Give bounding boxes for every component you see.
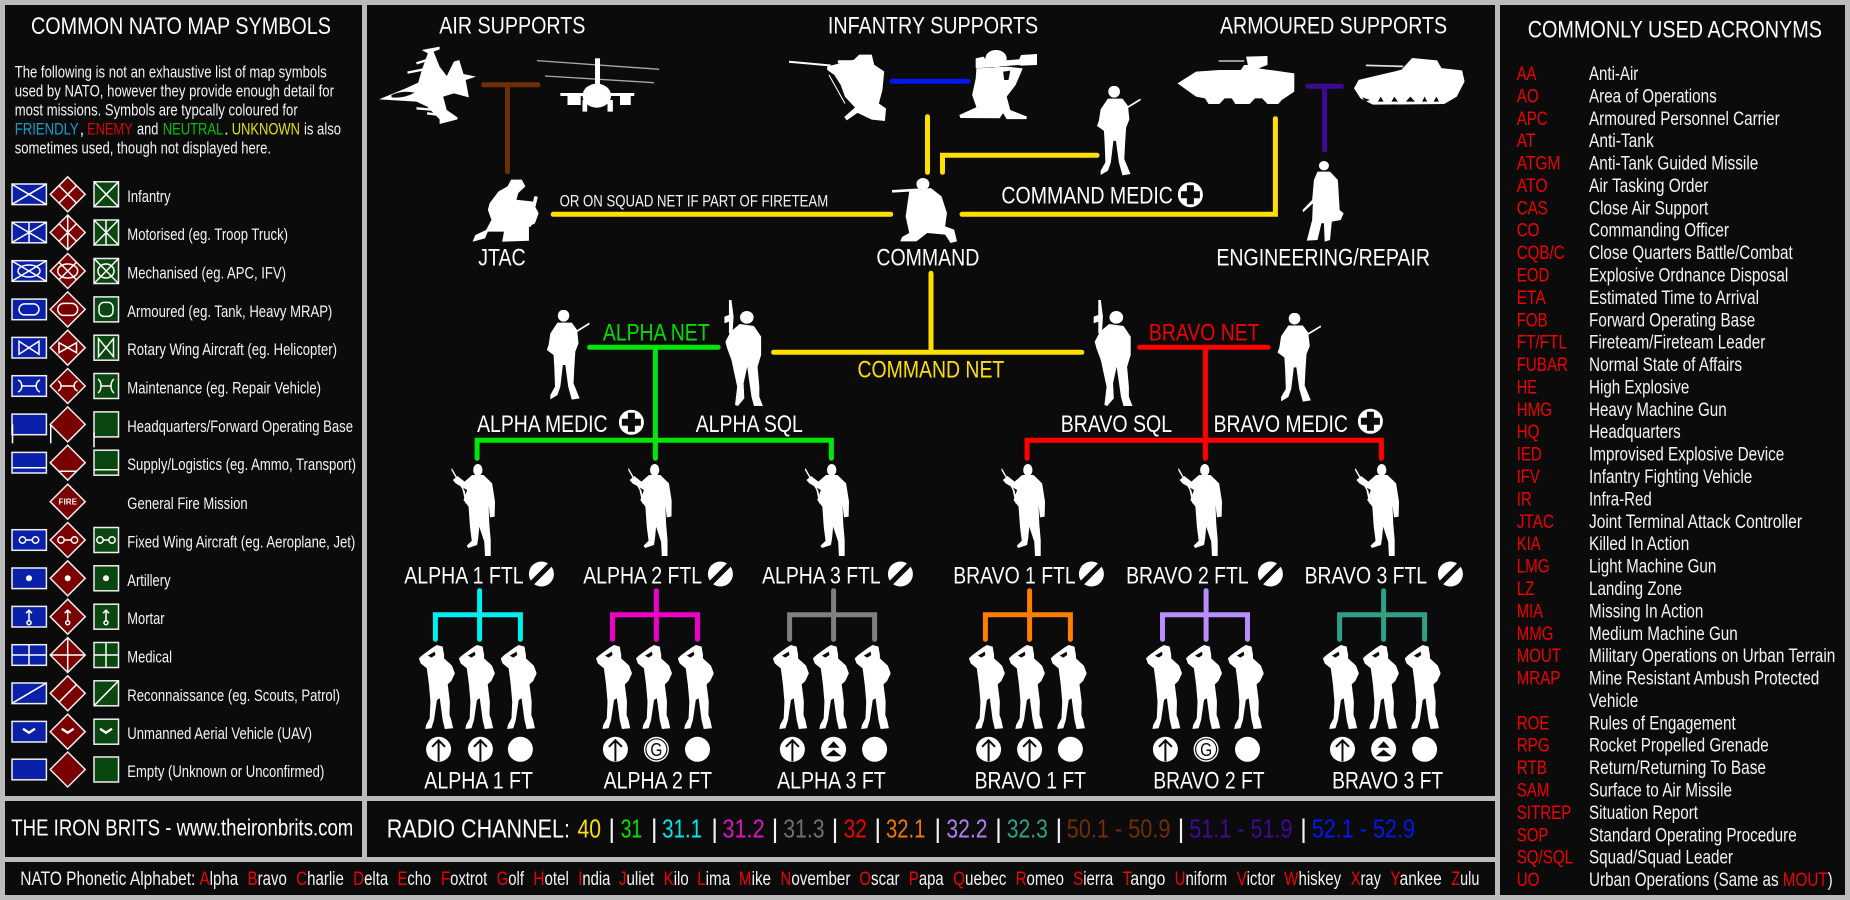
- panel: radio channels: 40: [578, 813, 601, 843]
- acronym list: Fireteam/Fireteam Leader: [1589, 333, 1766, 354]
- heading: air supports: AIR SUPPORTS: [439, 13, 585, 40]
- heading: infantry supports: INFANTRY SUPPORTS: [828, 13, 1038, 40]
- acronym list: IFV: [1517, 467, 1540, 488]
- panel: website credit: [5, 801, 362, 857]
- panel: radio channels: |: [874, 813, 881, 843]
- legend row: medical: [12, 638, 172, 672]
- acronym list: AO: [1517, 86, 1539, 107]
- connector: command net: [774, 273, 1082, 352]
- icon: JTAC kneeling soldier: [472, 180, 538, 242]
- acronym list: Landing Zone: [1589, 579, 1682, 600]
- group: alpha 1 fireteam: ALPHA 1 FT: [424, 768, 533, 795]
- panel: radio channels: RADIO CHANNEL:: [387, 813, 570, 843]
- panel: NATO phonetic alphabet: Romeo: [1016, 869, 1064, 890]
- legend row: maintenance: [12, 368, 321, 404]
- panel: NATO phonetic alphabet: Mike: [739, 869, 771, 890]
- acronym list: IED: [1517, 445, 1542, 466]
- acronym list: [1517, 64, 1835, 891]
- panel: NATO phonetic alphabet: Quebec: [953, 869, 1006, 890]
- acronym list: AA: [1517, 64, 1537, 85]
- panel: website credit: THE IRON BRITS - www.theironbrits.com: [11, 815, 353, 841]
- panel: NATO phonetic alphabet: Delta: [353, 869, 389, 890]
- panel: common NATO map symbols: [5, 5, 362, 796]
- label: alpha net: ALPHA NET: [603, 319, 710, 346]
- label: alpha squad leader: ALPHA SQL: [696, 411, 803, 438]
- connector: command to medic: [942, 155, 1097, 172]
- panel: NATO phonetic alphabet: Foxtrot: [441, 869, 488, 890]
- acronym list: Commanding Officer: [1589, 221, 1730, 242]
- group: alpha 2 fireteam: [583, 464, 733, 795]
- acronym list: Anti-Tank: [1589, 131, 1654, 152]
- acronym list: AT: [1517, 131, 1536, 152]
- panel: radio channels: |: [1300, 813, 1307, 843]
- acronym list: SOP: [1517, 825, 1548, 846]
- text block: introduction: sometimes used, though not displayed here.: [15, 139, 271, 158]
- icon: bravo medic cross: [1358, 409, 1383, 434]
- acronym list: RTB: [1517, 758, 1547, 779]
- panel: radio channels: 31.1: [662, 813, 702, 843]
- legend row: infantry: [12, 177, 171, 212]
- acronym list: Anti-Air: [1589, 64, 1639, 85]
- group: alpha 2 fireteam: ALPHA 2 FTL: [583, 562, 702, 589]
- icon: command medic soldier: [1097, 86, 1141, 175]
- acronym list: Air Tasking Order: [1589, 176, 1709, 197]
- group: alpha 1 fireteam: ALPHA 1 FTL: [404, 562, 524, 589]
- text block: introduction: used by NATO, however they provide enough detail for: [15, 82, 334, 101]
- acronym list: ROE: [1517, 713, 1549, 734]
- panel: radio channels: |: [1056, 813, 1062, 843]
- acronym list: RPG: [1517, 736, 1550, 757]
- panel: radio channels: 31.3: [783, 813, 825, 843]
- acronym list: UO: [1517, 870, 1539, 891]
- group: bravo 2 fireteam: [1126, 464, 1283, 795]
- group: alpha 3 fireteam: ALPHA 3 FT: [777, 768, 886, 795]
- icon: anti-tank soldier: [959, 50, 1037, 120]
- icon: tracked tank: [1354, 58, 1464, 105]
- panel: NATO phonetic alphabet: NATO Phonetic Alphabet:: [20, 869, 195, 890]
- label: bravo squad leader: BRAVO SQL: [1061, 411, 1172, 438]
- text block: introduction: most missions. Symbols are typcally coloured for: [15, 100, 298, 119]
- connector: command to infantry: [925, 117, 930, 172]
- panel: radio channels: |: [772, 813, 778, 843]
- panel: NATO phonetic alphabet: Kilo: [664, 869, 689, 890]
- icon: bravo squad leader: [1094, 300, 1132, 406]
- acronym list: Missing In Action: [1589, 601, 1703, 622]
- group: bravo 2 fireteam: BRAVO 2 FTL: [1126, 562, 1249, 589]
- icon: alpha medic cross: [619, 410, 644, 435]
- acronym list: Infantry Fighting Vehicle: [1589, 467, 1752, 488]
- legend row: headquarters: [12, 407, 353, 447]
- legend row: empty: Empty (Unknown or Unconfirmed): [127, 762, 324, 781]
- panel: NATO phonetic alphabet: November: [780, 869, 851, 890]
- icon: fighter jet: [379, 46, 476, 124]
- acronym list: HMG: [1517, 400, 1552, 421]
- panel: radio channels: 32.2: [946, 813, 988, 843]
- label: engineering and repair: ENGINEERING/REPAIR: [1216, 245, 1430, 272]
- legend row: reconnaissance: [12, 676, 340, 711]
- panel: radio channels: 51.1 - 51.9: [1189, 813, 1292, 843]
- legend row: general fire mission: FIRE: [58, 497, 77, 507]
- panel: radio channels: |: [832, 813, 838, 843]
- panel: radio channels: 52.1 - 52.9: [1312, 813, 1415, 843]
- group: alpha 2 fireteam: ALPHA 2 FT: [604, 768, 712, 795]
- acronym list: Improvised Explosive Device: [1589, 445, 1784, 466]
- acronym list: FOB: [1517, 310, 1548, 331]
- acronym list: ETA: [1517, 288, 1546, 309]
- panel: NATO phonetic alphabet: [5, 862, 1495, 895]
- panel: NATO phonetic alphabet: Golf: [497, 869, 525, 890]
- label: command medic: COMMAND MEDIC: [1001, 183, 1173, 210]
- panel: radio channels: 32.1: [886, 813, 925, 843]
- group: bravo 1 fireteam: [953, 464, 1104, 795]
- legend row: motorised: Motorised (eg. Troop Truck): [127, 225, 288, 244]
- text block: introduction: The following is not an exhaustive list of map symbols: [15, 62, 327, 81]
- acronym list: Vehicle: [1589, 691, 1638, 712]
- text block: introduction: ENEMY: [87, 120, 133, 139]
- text block: introduction: ,: [80, 120, 84, 139]
- group: alpha 2 fireteam: G: [650, 740, 662, 760]
- acronym list: Urban Operations (Same as MOUT): [1589, 870, 1833, 891]
- panel: radio channels: |: [1178, 813, 1184, 843]
- heading: armoured supports: ARMOURED SUPPORTS: [1220, 13, 1447, 40]
- acronym list: HE: [1517, 378, 1537, 398]
- panel: NATO phonetic alphabet: Charlie: [296, 869, 344, 890]
- panel: NATO phonetic alphabet: India: [578, 869, 611, 890]
- icon: bravo medic soldier: [1278, 313, 1321, 402]
- label: command: COMMAND: [876, 245, 979, 272]
- legend row: infantry: Infantry: [127, 187, 171, 206]
- group: alpha 3 fireteam: [762, 464, 913, 795]
- group: alpha 3 fireteam: ALPHA 3 FTL: [762, 562, 881, 589]
- acronym list: Standard Operating Procedure: [1589, 825, 1797, 846]
- acronym list: MOUT: [1517, 646, 1561, 667]
- panel: radio channels: |: [934, 813, 941, 843]
- panel: radio net structure: [367, 5, 1495, 796]
- acronym list: ATGM: [1517, 154, 1560, 175]
- panel: radio channels: [367, 801, 1495, 857]
- group: bravo 3 fireteam: [1305, 464, 1463, 795]
- text block: introduction: is also: [304, 120, 341, 139]
- legend row: reconnaissance: Reconnaissance (eg. Scouts, Patrol): [127, 686, 340, 705]
- legend row: general fire mission: [50, 484, 248, 519]
- acronym list: Rocket Propelled Grenade: [1589, 736, 1769, 757]
- panel: radio channels: 32.3: [1007, 813, 1048, 843]
- text block: introduction: .: [224, 120, 229, 139]
- text block: introduction: [15, 62, 341, 158]
- connector: command to armour: [962, 119, 1275, 214]
- legend row: rotary wing aircraft: Rotary Wing Aircraft (eg. Helicopter): [127, 340, 337, 359]
- legend row: mechanised: Mechanised (eg. APC, IFV): [127, 264, 286, 282]
- legend row: armoured: [12, 292, 332, 327]
- acronym list: APC: [1517, 109, 1548, 130]
- acronym list: FUBAR: [1517, 355, 1568, 376]
- legend row: maintenance: Maintenance (eg. Repair Vehicle): [127, 378, 321, 398]
- acronym list: KIA: [1517, 534, 1541, 555]
- icon: alpha medic soldier: [547, 310, 590, 400]
- acronym list: HQ: [1517, 422, 1539, 443]
- acronym list: SQ/SQL: [1517, 848, 1573, 869]
- label: or on squad net: OR ON SQUAD NET IF PART OF FIRETEAM: [560, 192, 828, 211]
- acronym list: ATO: [1517, 176, 1548, 197]
- acronym list: SAM: [1517, 780, 1549, 802]
- connector: air net: [484, 85, 538, 172]
- panel: radio channels: 50.1 - 50.9: [1067, 813, 1170, 843]
- panel: NATO phonetic alphabet: Sierra: [1073, 869, 1114, 890]
- panel: radio channels: |: [995, 813, 1002, 843]
- label: bravo net: BRAVO NET: [1149, 319, 1260, 346]
- label: alpha medic: ALPHA MEDIC: [477, 411, 608, 438]
- panel: NATO phonetic alphabet: Hotel: [534, 869, 569, 890]
- legend row: unmanned aerial vehicle: Unmanned Aerial Vehicle (UAV): [127, 724, 312, 743]
- panel: NATO phonetic alphabet: Tango: [1122, 869, 1165, 890]
- panel: NATO phonetic alphabet: Zulu: [1451, 869, 1479, 890]
- acronym list: CO: [1517, 221, 1539, 242]
- panel: acronyms: [1500, 5, 1845, 895]
- panel: NATO phonetic alphabet: Uniform: [1175, 869, 1227, 890]
- acronym list: Situation Report: [1589, 803, 1699, 824]
- panel: NATO phonetic alphabet: Alpha: [200, 869, 239, 890]
- acronym list: MRAP: [1517, 668, 1560, 690]
- legend row: artillery: [12, 561, 171, 596]
- acronym list: High Explosive: [1589, 378, 1689, 398]
- acronym list: Estimated Time to Arrival: [1589, 288, 1759, 309]
- acronym list: MIA: [1517, 601, 1543, 622]
- connector: infantry net: [892, 79, 968, 84]
- acronym list: Anti-Tank Guided Missile: [1589, 154, 1758, 175]
- label: command net: COMMAND NET: [858, 356, 1005, 383]
- acronym list: CQB/C: [1517, 243, 1565, 264]
- connector: JTAC to command: [553, 212, 891, 217]
- panel: radio channels: 31.2: [722, 813, 765, 843]
- legend row: mortar: [12, 599, 165, 634]
- group: bravo 3 fireteam: BRAVO 3 FTL: [1305, 562, 1427, 589]
- text block: introduction: and: [137, 120, 158, 139]
- acronym list: SITREP: [1517, 803, 1571, 824]
- legend row: rotary wing aircraft: [12, 330, 337, 365]
- icon: command medic cross: [1178, 182, 1203, 207]
- icon: attack helicopter: [536, 58, 660, 112]
- panel: NATO phonetic alphabet: Lima: [697, 869, 731, 890]
- group: bravo 2 fireteam: G: [1200, 740, 1212, 760]
- heading: common NATO map symbols: COMMON NATO MAP SYMBOLS: [31, 13, 331, 40]
- legend row: medical: Medical: [127, 648, 172, 666]
- acronym list: Infra-Red: [1589, 489, 1652, 510]
- text block: introduction: UNKNOWN: [232, 120, 300, 139]
- icon: engineer: [1302, 161, 1344, 242]
- group: bravo 1 fireteam: BRAVO 1 FT: [975, 768, 1086, 795]
- acronym list: Forward Operating Base: [1589, 310, 1755, 331]
- acronym list: LZ: [1517, 579, 1535, 600]
- icon: alpha squad leader: [724, 300, 763, 406]
- acronym list: Return/Returning To Base: [1589, 758, 1766, 779]
- label: bravo medic: BRAVO MEDIC: [1214, 411, 1348, 438]
- legend row: supply and logistics: Supply/Logistics (eg. Ammo, Transport): [127, 455, 356, 474]
- legend row: mechanised: [12, 254, 286, 288]
- panel: NATO phonetic alphabet: Juliet: [619, 869, 655, 890]
- group: bravo 2 fireteam: BRAVO 2 FT: [1153, 768, 1265, 795]
- acronym list: EOD: [1517, 266, 1549, 286]
- acronym list: Headquarters: [1589, 422, 1681, 443]
- acronym list: Light Machine Gun: [1589, 557, 1716, 578]
- panel: NATO phonetic alphabet: Victor: [1237, 869, 1276, 890]
- acronym list: Close Quarters Battle/Combat: [1589, 243, 1793, 264]
- legend row: empty: [12, 752, 324, 787]
- panel: radio channels: |: [651, 813, 658, 843]
- acronym list: LMG: [1517, 557, 1550, 578]
- panel: NATO phonetic alphabet: Oscar: [859, 869, 900, 890]
- legend row: supply and logistics: [12, 445, 356, 480]
- legend row: motorised: [12, 215, 288, 250]
- group: bravo 3 fireteam: BRAVO 3 FT: [1332, 768, 1443, 795]
- legend row: armoured: Armoured (eg. Tank, Heavy MRAP): [127, 302, 332, 321]
- legend row: mortar: Mortar: [127, 609, 165, 628]
- acronym list: JTAC: [1517, 512, 1554, 533]
- icon: command kneeling soldier: [892, 178, 957, 243]
- panel: NATO phonetic alphabet: Bravo: [248, 869, 287, 890]
- connector: alpha net: [477, 347, 831, 458]
- connector: armoured net: [1308, 86, 1341, 150]
- acronym list: Heavy Machine Gun: [1589, 400, 1727, 421]
- connector: bravo net: [1027, 347, 1381, 458]
- legend row: headquarters: Headquarters/Forward Operating Base: [127, 417, 353, 436]
- acronym list: Surface to Air Missile: [1589, 780, 1732, 802]
- acronym list: Close Air Support: [1589, 198, 1709, 219]
- panel: NATO phonetic alphabet: Whiskey: [1284, 869, 1341, 890]
- panel: NATO phonetic alphabet: Echo: [398, 869, 431, 890]
- panel: radio channels: 32: [844, 813, 867, 843]
- icon: sniper: [789, 54, 886, 121]
- group: bravo 1 fireteam: BRAVO 1 FTL: [953, 562, 1076, 589]
- panel: NATO phonetic alphabet: Yankee: [1390, 869, 1442, 890]
- icon: wheeled armoured vehicle: [1178, 56, 1294, 104]
- acronym list: Area of Operations: [1589, 86, 1717, 107]
- panel: radio channels: 31: [621, 813, 642, 843]
- panel: radio channels: |: [711, 813, 718, 843]
- legend row: artillery: Artillery: [127, 571, 171, 590]
- panel: NATO phonetic alphabet: Xray: [1351, 869, 1381, 890]
- acronym list: Squad/Squad Leader: [1589, 848, 1734, 869]
- panel: radio channels: |: [608, 813, 615, 843]
- group: alpha 1 fireteam: [404, 464, 554, 795]
- acronym list: Joint Terminal Attack Controller: [1589, 512, 1803, 533]
- legend row: fixed wing aircraft: [12, 522, 355, 558]
- acronym list: Medium Machine Gun: [1589, 624, 1738, 645]
- panel: NATO phonetic alphabet: Papa: [909, 869, 944, 890]
- text block: introduction: NEUTRAL: [163, 120, 223, 139]
- acronym list: Explosive Ordnance Disposal: [1589, 266, 1788, 286]
- acronym list: Killed In Action: [1589, 534, 1689, 555]
- legend row: general fire mission: General Fire Mission: [127, 494, 248, 513]
- legend row: fixed wing aircraft: Fixed Wing Aircraft (eg. Aeroplane, Jet): [127, 532, 355, 552]
- acronym list: Armoured Personnel Carrier: [1589, 109, 1780, 130]
- acronym list: Normal State of Affairs: [1589, 355, 1742, 376]
- acronym list: CAS: [1517, 198, 1548, 219]
- legend row: unmanned aerial vehicle: [12, 714, 312, 749]
- acronym list: Rules of Engagement: [1589, 713, 1736, 734]
- label: JTAC: JTAC: [478, 245, 526, 272]
- acronym list: IR: [1517, 489, 1532, 510]
- text block: introduction: FRIENDLY: [15, 120, 79, 139]
- acronym list: MMG: [1517, 624, 1553, 645]
- acronym list: FT/FTL: [1517, 333, 1567, 354]
